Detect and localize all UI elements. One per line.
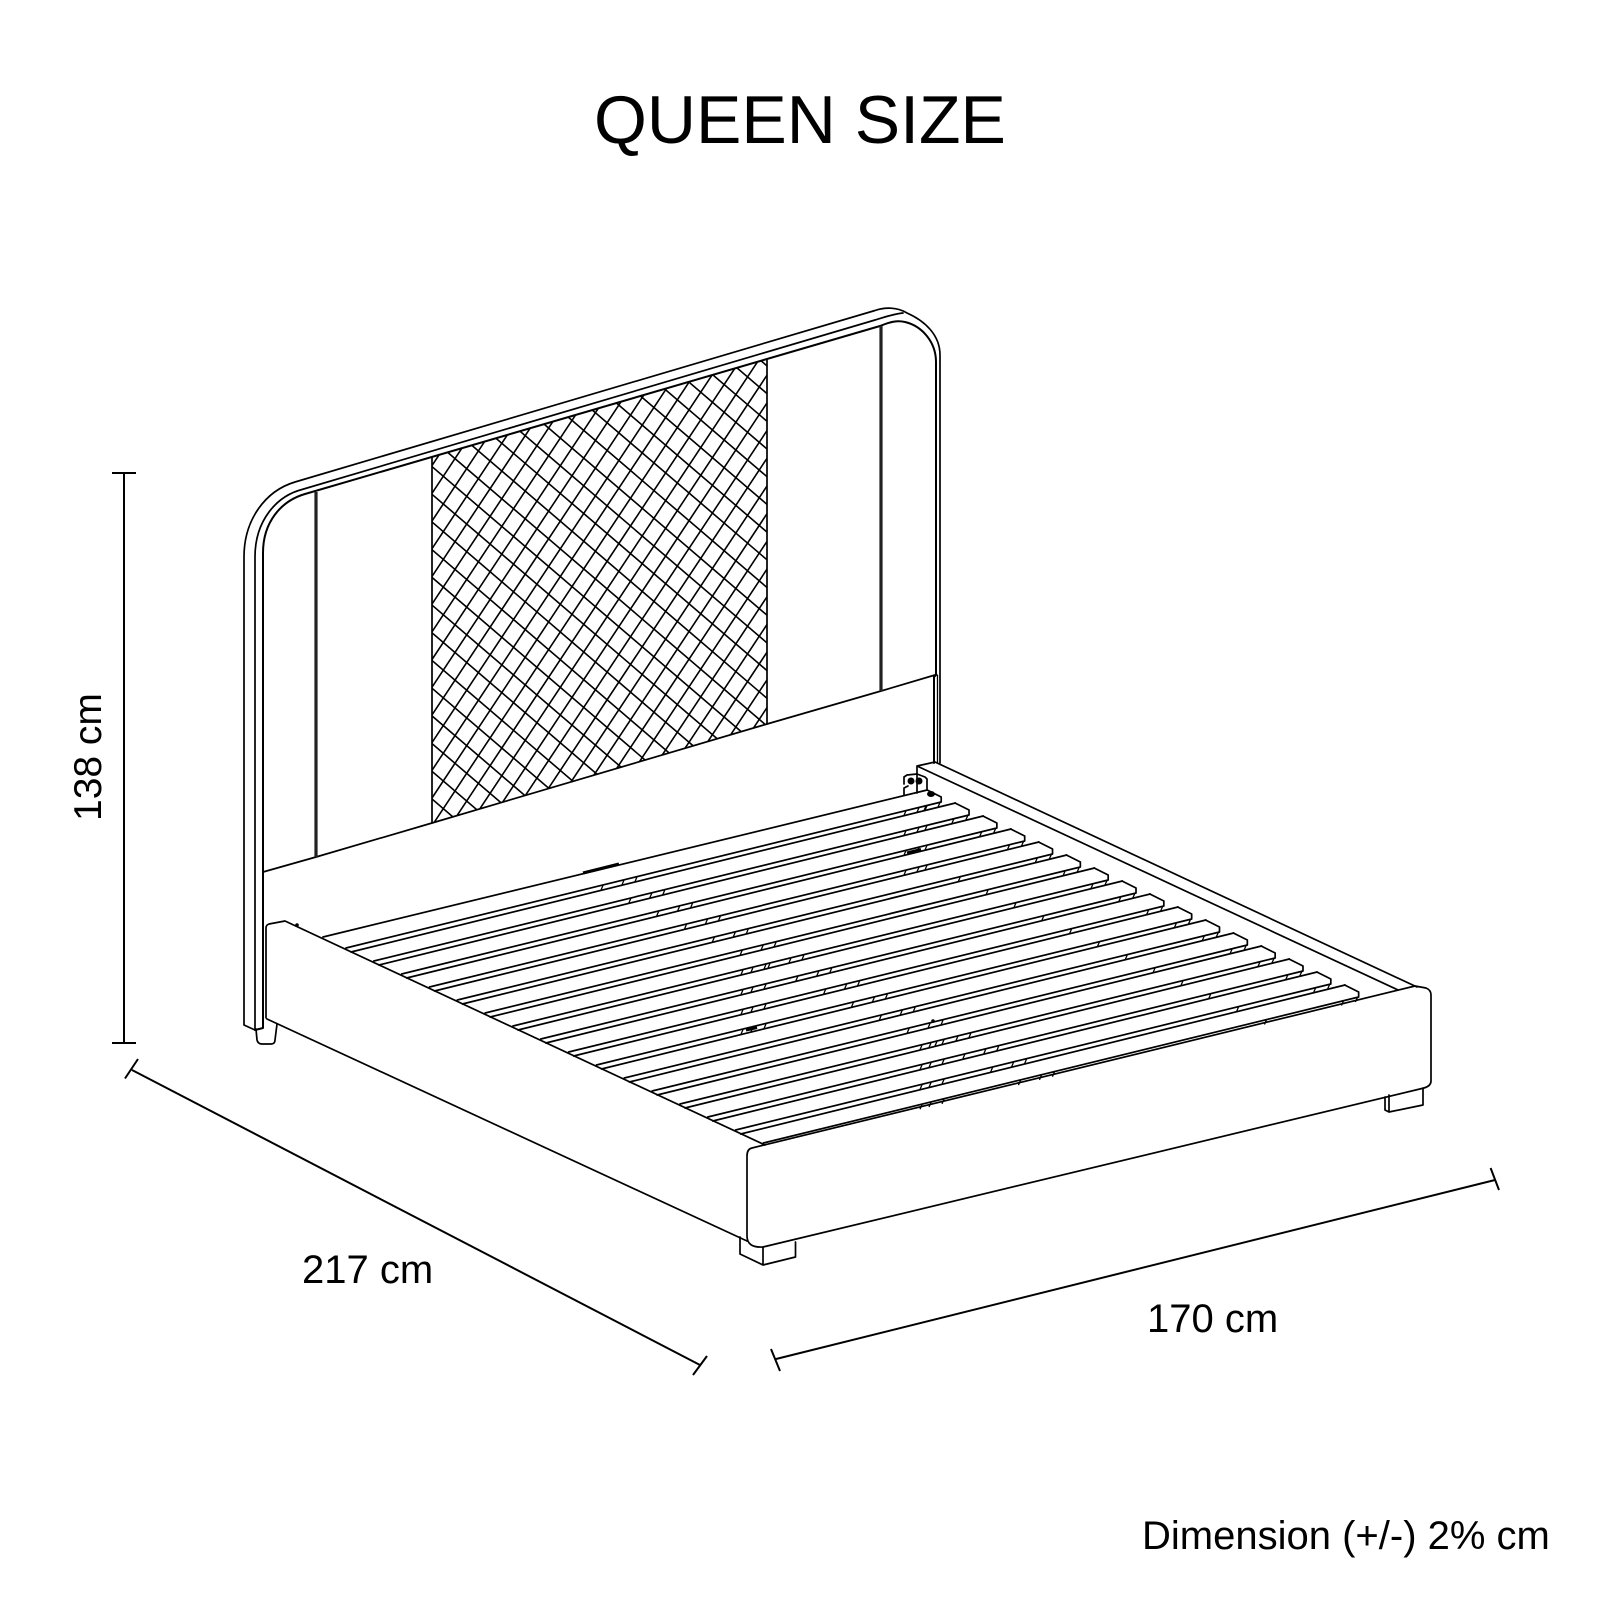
length dimension line xyxy=(125,1059,707,1375)
slat 8 xyxy=(541,881,1150,1043)
height dimension xyxy=(67,473,136,1043)
headboard xyxy=(243,307,941,1045)
back slat edge xyxy=(323,790,927,937)
slat 3 xyxy=(402,816,1011,978)
slat 14 xyxy=(708,959,1317,1121)
slat 10 xyxy=(596,907,1206,1069)
left panel seam xyxy=(314,492,318,857)
height dimension line xyxy=(112,473,136,1043)
slat 1 xyxy=(346,790,955,952)
right side rail xyxy=(917,762,1417,990)
right panel seam xyxy=(879,326,883,691)
bed illustration xyxy=(244,0,1431,1265)
slat 7 xyxy=(513,868,1122,1030)
slat bolt xyxy=(927,791,935,797)
width dimension xyxy=(771,1168,1499,1371)
dark fittings on slats xyxy=(295,850,935,1030)
length dimension xyxy=(125,1059,707,1375)
bracket bolt left xyxy=(908,778,914,784)
width dimension line xyxy=(771,1168,1499,1371)
slat 16 lower edge xyxy=(763,985,1359,1143)
crosshatch quilting xyxy=(432,361,766,822)
headboard middle frame line xyxy=(255,313,903,1030)
bracket outline xyxy=(904,774,927,795)
slat 9 xyxy=(569,894,1178,1056)
bracket bolt right xyxy=(916,778,922,784)
tolerance note: Dimension (+/-) 2% cm xyxy=(1142,1514,1550,1558)
slat 12 xyxy=(652,933,1262,1095)
slats xyxy=(295,790,1359,1143)
length label: 217 cm xyxy=(302,1248,433,1292)
headboard right lower second line xyxy=(936,675,938,763)
front rail xyxy=(747,986,1431,1247)
quilted panel xyxy=(431,360,768,824)
title: QUEEN SIZE xyxy=(594,82,1006,158)
left side rail xyxy=(266,921,765,1241)
front corner leg xyxy=(740,1237,796,1265)
headboard panel base line xyxy=(263,675,935,872)
headboard inner frame line xyxy=(255,321,936,1030)
left tapered leg xyxy=(256,1024,277,1044)
slat fastener ticks xyxy=(741,806,1266,1109)
height label: 138 cm xyxy=(67,693,110,821)
width label: 170 cm xyxy=(1147,1297,1278,1341)
slat 6 xyxy=(485,855,1095,1017)
headboard outer frame xyxy=(244,308,940,1030)
slat 4 xyxy=(429,829,1039,991)
quilted panel edges xyxy=(432,359,767,823)
right back leg xyxy=(1385,1088,1423,1112)
slat 15 xyxy=(736,972,1345,1134)
slat 2 xyxy=(374,803,983,965)
slat 11 xyxy=(624,920,1234,1082)
slat 5 xyxy=(457,842,1067,1004)
slat 13 xyxy=(680,946,1289,1108)
headboard bracket xyxy=(904,774,935,797)
bed frame xyxy=(266,762,1431,1265)
